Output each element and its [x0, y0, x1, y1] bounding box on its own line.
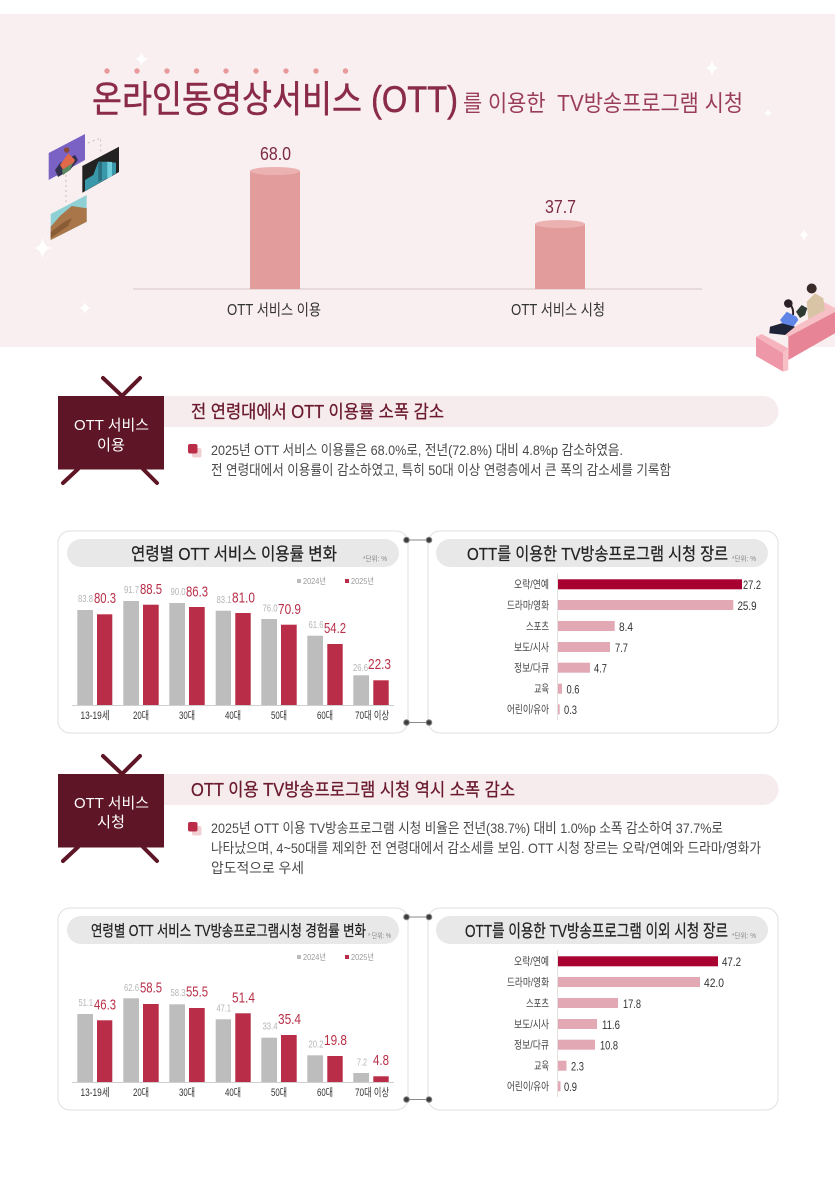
text block: section 2 summary: 압도적으로 우세	[211, 860, 304, 876]
bar chart: 91.7	[124, 584, 139, 596]
horizontal bar chart: 25.9	[738, 599, 757, 613]
panel: usage rate by age	[58, 531, 408, 733]
bar chart: 50대	[271, 709, 287, 722]
bar chart: 22.3	[368, 656, 391, 673]
axis label: OTT service use: OTT 서비스 이용	[227, 301, 321, 319]
bar chart: 60대	[317, 1086, 333, 1099]
heading pill: section 1	[160, 396, 778, 427]
unit note: *단위: %	[732, 554, 756, 563]
bar chart: 83.8	[78, 593, 93, 605]
horizontal bar chart	[507, 950, 741, 1097]
panel: non-TV viewing genre	[428, 908, 778, 1110]
text block: section 2 summary	[211, 820, 761, 876]
bar chart	[72, 980, 394, 1099]
horizontal bar chart: 드라마/영화	[507, 976, 549, 989]
bar chart: 4.8	[373, 1052, 389, 1069]
bar chart: 55.5	[186, 984, 208, 1000]
icon: video thumbnails	[49, 134, 119, 240]
unit note: * 단위: %	[368, 931, 391, 940]
horizontal bar chart: 0.3	[564, 703, 577, 717]
heading pill: section 2: OTT 이용 TV방송프로그램 시청 역시 소폭 감소	[191, 780, 515, 800]
bar chart: 13-19세	[80, 709, 110, 722]
panel: section 2	[58, 756, 778, 876]
bar chart: 50대	[271, 1086, 287, 1099]
bar chart: 54.2	[324, 620, 346, 637]
horizontal bar chart: 스포츠	[526, 997, 549, 1010]
chart title: OTT를 이용한 TV방송프로그램 이외 시청 장르	[465, 921, 728, 941]
bar chart: 51.4	[232, 990, 255, 1006]
bar chart: 51.1	[78, 997, 93, 1009]
legend: 2025년	[351, 576, 374, 586]
icon: bullet	[188, 822, 202, 836]
horizontal bar chart: 교육	[534, 1060, 549, 1072]
horizontal bar chart: 교육	[534, 682, 549, 696]
horizontal bar chart: 정보/다큐	[514, 1038, 549, 1052]
legend	[297, 576, 374, 586]
bar chart: 35.4	[278, 1011, 301, 1028]
bar chart: 20대	[133, 709, 149, 722]
bar chart: 40대	[225, 1086, 241, 1099]
legend: 2024년	[303, 952, 326, 962]
axis label: OTT service viewing: OTT 서비스 시청	[511, 301, 605, 319]
title: 를 이용한 TV방송프로그램 시청	[463, 90, 743, 116]
bar chart: 76.0	[262, 602, 278, 614]
horizontal bar chart: 10.8	[600, 1038, 618, 1052]
bar chart: OTT use and viewing	[133, 144, 702, 319]
horizontal bar chart: 보도/시사	[514, 641, 549, 654]
bar chart: 70.9	[278, 601, 301, 618]
text block: section 1 summary: 2025년 OTT 서비스 이용률은 68.0%로, 전년(72.8%) 대비 4.8%p 감소하였음.	[211, 442, 623, 458]
bar chart: 70대 이상	[355, 709, 389, 722]
bar chart: 19.8	[324, 1032, 347, 1049]
text block: section 2 summary: 나타났으며, 4~50대를 제외한 전 연령대에서 감소세를 보임. OTT 시청 장르는 오락/연예와 드라마/영화가	[211, 840, 761, 856]
horizontal bar chart: 보도/시사	[514, 1018, 549, 1031]
chart title: 연령별 OTT 서비스 TV방송프로그램시청 경험률 변화	[91, 922, 366, 940]
icon: TV badge	[58, 378, 164, 483]
horizontal bar chart: 2.3	[571, 1060, 584, 1074]
chart title: 연령별 OTT 서비스 이용률 변화	[131, 544, 337, 564]
horizontal bar chart: 7.7	[615, 641, 628, 655]
text block: section 1 summary: 전 연령대에서 이용률이 감소하였고, 특히 50대 이상 연령층에서 큰 폭의 감소세를 기록함	[211, 462, 671, 478]
text block: section 1 summary	[211, 442, 671, 478]
horizontal bar chart: 47.2	[722, 955, 741, 969]
horizontal bar chart: 어린이/유아	[507, 703, 549, 716]
bar chart: 61.6	[308, 619, 324, 631]
icon: TV badge: 시청	[97, 814, 125, 831]
horizontal bar chart: 4.7	[594, 662, 607, 676]
value: 68.0: 68.0	[260, 144, 291, 164]
bar chart: 7.2	[357, 1056, 367, 1068]
unit note: *단위: %	[732, 931, 756, 940]
horizontal bar chart: 0.6	[566, 682, 580, 696]
horizontal bar chart	[507, 573, 761, 720]
bar chart: 20대	[133, 1086, 149, 1099]
legend: 2024년	[303, 576, 326, 586]
title: 온라인동영상서비스 (OTT)	[92, 79, 458, 120]
icon: TV badge: OTT 서비스	[74, 795, 149, 812]
heading pill: section 2	[160, 774, 778, 805]
legend: 2025년	[351, 952, 374, 962]
horizontal bar chart: 27.2	[743, 578, 761, 592]
bar chart: 83.1	[216, 594, 232, 606]
horizontal bar chart: 오락/연예	[514, 955, 549, 968]
panel: viewing experience by age	[58, 908, 408, 1110]
panel: viewing genre	[428, 531, 778, 733]
bar chart: 86.3	[186, 584, 208, 600]
chart title: OTT를 이용한 TV방송프로그램 시청 장르	[467, 544, 728, 564]
bar chart: 33.4	[262, 1020, 278, 1032]
icon: bullet	[188, 444, 202, 458]
bar chart: 62.6	[124, 982, 139, 994]
legend	[297, 952, 374, 962]
bar chart	[72, 581, 394, 722]
bar chart: 30대	[179, 709, 195, 722]
horizontal bar chart: 0.9	[564, 1080, 577, 1094]
bar chart: 58.3	[170, 987, 186, 999]
horizontal bar chart: 정보/다큐	[514, 662, 549, 674]
icon: TV badge: OTT 서비스	[74, 417, 149, 434]
bar chart: 70대 이상	[355, 1086, 389, 1099]
horizontal bar chart: 오락/연예	[514, 578, 549, 591]
bar chart: 90.0	[170, 586, 186, 598]
horizontal bar chart: 42.0	[704, 976, 724, 990]
horizontal bar chart: 스포츠	[526, 620, 549, 633]
panel: section 1	[58, 378, 778, 483]
bar chart: 58.5	[140, 980, 162, 996]
bar chart: 80.3	[94, 590, 116, 607]
bar chart: 81.0	[232, 590, 255, 606]
bar chart: 20.2	[308, 1038, 324, 1050]
bar chart: 47.1	[216, 1002, 231, 1014]
panel: header background	[0, 14, 835, 347]
horizontal bar chart: 17.8	[623, 997, 641, 1011]
decorative title dots	[104, 68, 348, 74]
bar: OTT service use	[250, 167, 300, 289]
bar chart: 88.5	[140, 581, 162, 598]
icon: TV badge	[58, 756, 164, 861]
value: 37.7: 37.7	[545, 197, 576, 217]
connector: bottom row rings	[404, 914, 432, 1102]
bar chart: 40대	[225, 709, 241, 722]
horizontal bar chart: 어린이/유아	[507, 1080, 549, 1093]
bar chart: 13-19세	[80, 1086, 110, 1099]
unit note: *단위: %	[363, 554, 387, 563]
bar: OTT service viewing	[535, 220, 585, 289]
text block: section 2 summary: 2025년 OTT 이용 TV방송프로그램 시청 비율은 전년(38.7%) 대비 1.0%p 소폭 감소하여 37.7%로	[211, 820, 723, 836]
bar chart: 60대	[317, 709, 333, 722]
icon: couple on sofa	[756, 284, 835, 372]
horizontal bar chart: 8.4	[619, 620, 633, 634]
bar chart: 46.3	[94, 996, 116, 1014]
title	[92, 79, 743, 120]
horizontal bar chart: 11.6	[602, 1018, 620, 1032]
bar chart: 30대	[179, 1086, 195, 1099]
horizontal bar chart: 드라마/영화	[507, 599, 549, 612]
connector: top row rings	[404, 537, 432, 725]
icon: TV badge: 이용	[97, 437, 125, 454]
bar chart: 26.6	[353, 662, 368, 674]
heading pill: section 1: 전 연령대에서 OTT 이용률 소폭 감소	[191, 402, 444, 422]
